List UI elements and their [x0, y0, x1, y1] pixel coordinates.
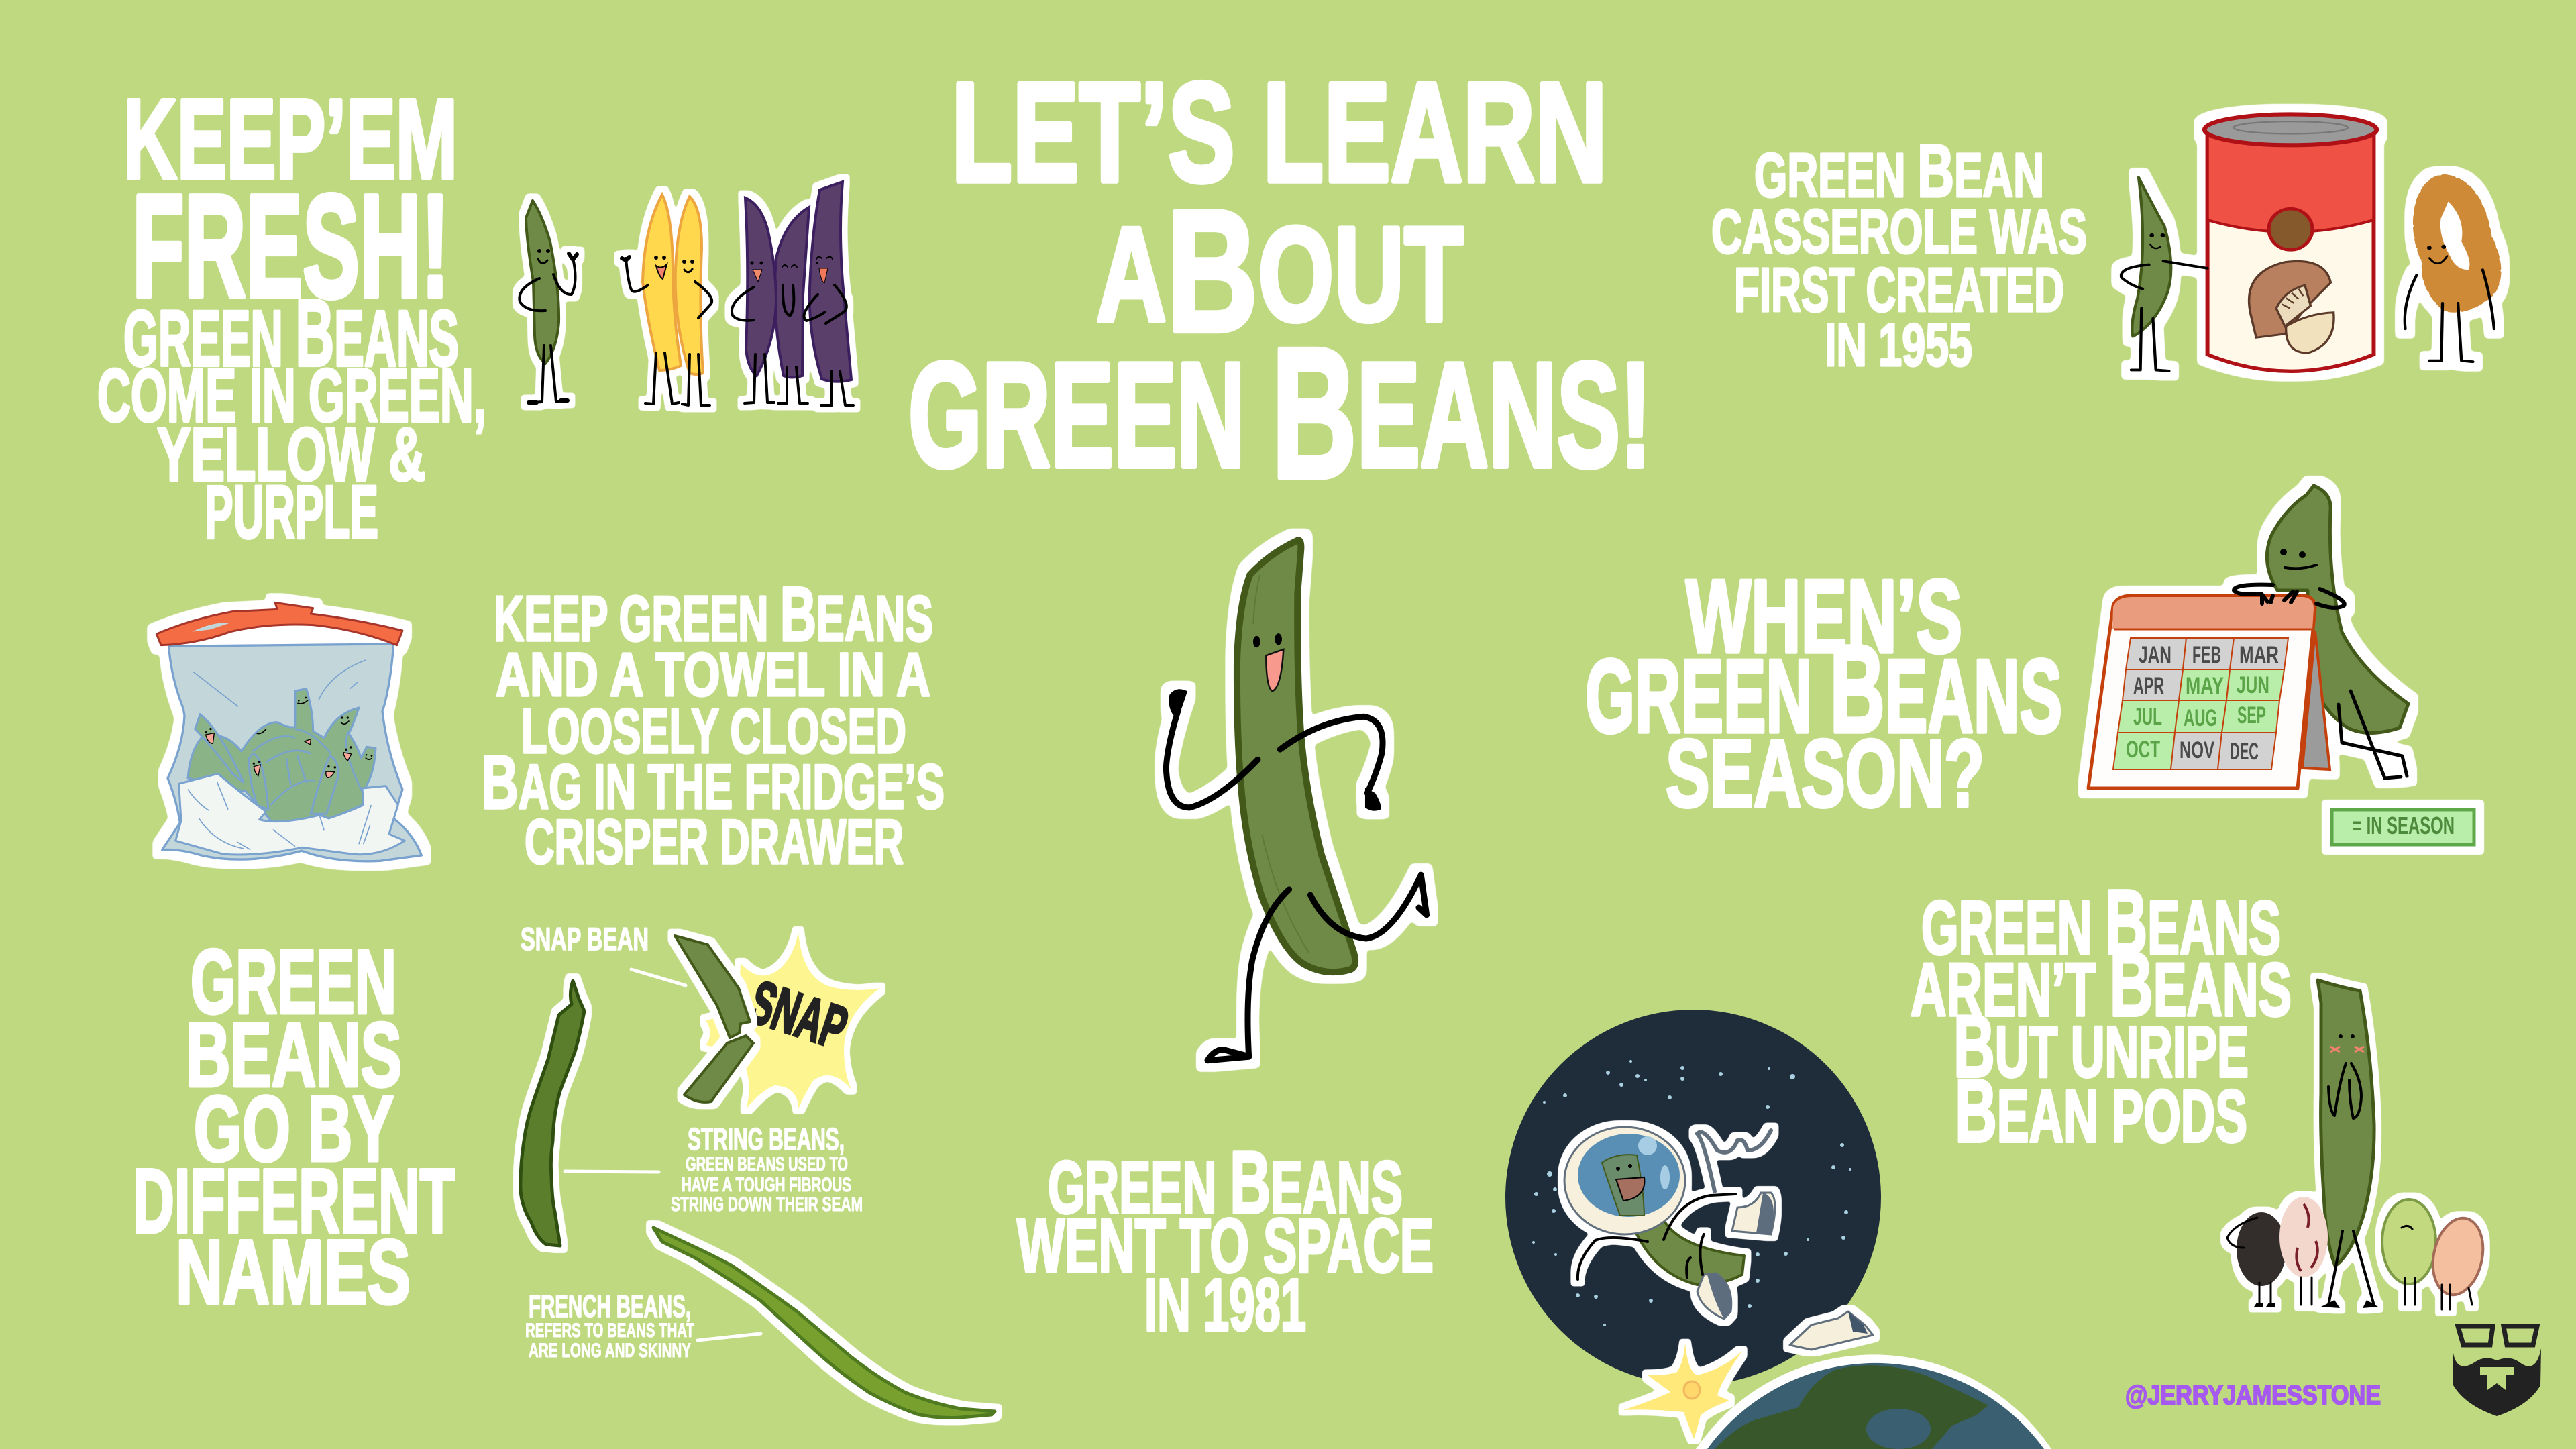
pinto bean [2279, 1197, 2328, 1305]
heading: casserole fact: CASSEROLE WAS [1711, 197, 2087, 266]
text: aren't beans: BEAN PODS [1955, 1061, 2247, 1161]
illustration: bag of beans [156, 602, 421, 861]
month labels: FEB [2192, 642, 2221, 668]
calendar front [2088, 596, 2315, 788]
heading: keep 'em fresh: FRESH! [132, 165, 449, 328]
illustration: running green bean [1166, 540, 1427, 1061]
heading: green beans go by different names: DIFFERENT [133, 1150, 455, 1252]
bean behind calendar [2267, 486, 2408, 778]
text: bag storage tip: LOOSELY CLOSED [521, 696, 906, 766]
heading: green beans go by different names: GREEN [191, 930, 396, 1032]
heading: green beans go by different names: GO BY [194, 1077, 394, 1181]
callout leader lines [565, 969, 761, 1340]
pale green bean [2382, 1199, 2436, 1305]
heading: green beans go by different names: BEANS [186, 1004, 402, 1106]
snap word: SNAP [742, 969, 855, 1063]
heading: green beans go by different names: NAMES [176, 1221, 411, 1323]
month labels: JUN [2237, 672, 2269, 698]
illustration: tall bean with small beans [2227, 980, 2489, 1309]
illustration: green, yellow and purple bean characters [519, 182, 853, 405]
title: LET’S LEARN [951, 53, 1607, 211]
illustration: space scene [1505, 1010, 2051, 1449]
purple bean characters [732, 182, 853, 405]
heading: when's green beans season [1585, 558, 2062, 827]
heading: casserole fact: GREEN BEAN [1754, 129, 2044, 213]
heading: when's green beans season: SEASON? [1666, 720, 1984, 827]
handle: @JERRYJAMESSTONE [2125, 1381, 2381, 1410]
towel [176, 773, 405, 855]
heading: keep 'em fresh: KEEP’EM [123, 76, 458, 203]
illustration: snap burst and snapped bean [675, 931, 880, 1109]
bean hands on calendar [2234, 585, 2345, 608]
heading: casserole fact [1711, 129, 2087, 379]
legend: in season [2332, 810, 2474, 845]
stars [1532, 1060, 1851, 1326]
month labels: MAR [2239, 642, 2279, 668]
month labels: JAN [2139, 642, 2171, 668]
illustration: soup can with bean and onion ring [2121, 114, 2498, 371]
month labels: DEC [2230, 739, 2259, 765]
arms, legs and hands [1166, 709, 1427, 1061]
title [908, 53, 1652, 517]
month labels: AUG [2184, 705, 2217, 731]
logo: bearded face with glasses [2453, 1326, 2541, 1416]
yellow bean characters [622, 195, 712, 405]
green bean character [519, 201, 577, 402]
heading: casserole fact: FIRST CREATED [1734, 255, 2064, 325]
text: green beans went to space: GREEN BEANS [1048, 1133, 1403, 1232]
callouts: bean name labels [521, 921, 863, 1362]
callouts: bean name labels: STRING BEANS, [688, 1122, 845, 1157]
heading: keep 'em fresh: PURPLE [205, 470, 378, 554]
plastic bag [162, 644, 421, 861]
night sky circle [1505, 1010, 1881, 1385]
title: A [1096, 200, 1193, 350]
heading: keep 'em fresh [97, 76, 486, 554]
heading: when's green beans season: WHEN’S [1686, 558, 1962, 674]
text: aren't beans [1911, 871, 2292, 1161]
heading: keep 'em fresh: GREEN BEANS [123, 280, 459, 386]
month cells [2113, 638, 2288, 769]
bean body [1237, 540, 1355, 972]
snap burst [706, 931, 880, 1109]
earth [1696, 1354, 2051, 1449]
text: bag storage tip: AND A TOWEL IN A [496, 641, 930, 709]
text: aren't beans: AREN’T BEANS [1911, 932, 2292, 1035]
callouts: bean name labels: ARE LONG AND SKINNY [529, 1340, 691, 1362]
callouts: bean name labels: STRING DOWN THEIR SEAM [671, 1193, 863, 1216]
snapped bean halves [675, 936, 753, 1102]
illustration: bean with season calendar [2088, 486, 2408, 788]
text: bag storage tip: BAG IN THE FRIDGE’S [482, 740, 945, 824]
legend: in season: = IN SEASON [2353, 812, 2455, 839]
green bean pointing [2121, 177, 2208, 371]
callouts: bean name labels: SNAP BEAN [521, 921, 649, 957]
month labels: MAY [2186, 673, 2224, 699]
heading: when's green beans season: GREEN BEANS [1585, 620, 2062, 759]
heading: keep 'em fresh: COME IN GREEN, [97, 354, 486, 437]
black bean [2227, 1212, 2286, 1307]
beans inside the bag [188, 689, 376, 823]
text: aren't beans: BUT UNRIPE [1953, 997, 2249, 1095]
tall bean [2318, 980, 2378, 1308]
text: green beans went to space [1017, 1133, 1434, 1346]
calendar back [2302, 631, 2330, 769]
astronaut bean [1564, 1127, 1775, 1319]
illustration: string bean [521, 981, 584, 1246]
face [1253, 636, 1260, 647]
callouts: bean name labels: GREEN BEANS USED TO [686, 1153, 848, 1175]
soup can [2204, 114, 2377, 371]
callouts: bean name labels: HAVE A TOUGH FIBROUS [682, 1174, 851, 1196]
month labels: NOV [2180, 737, 2214, 763]
title: EANS! [1357, 332, 1652, 498]
lost boot [1790, 1311, 1873, 1350]
text: aren't beans: GREEN BEANS [1921, 871, 2281, 974]
month labels: SEP [2237, 702, 2266, 729]
text: green beans went to space: WENT TO SPACE [1017, 1203, 1434, 1289]
illustration: french bean [653, 1228, 995, 1417]
text: bag storage tip: CRISPER DRAWER [525, 806, 904, 877]
text: bag storage tip [482, 572, 945, 877]
text: green beans went to space: IN 1981 [1144, 1264, 1306, 1346]
callouts: bean name labels: FRENCH BEANS, [529, 1289, 691, 1324]
title: OUT [1258, 200, 1464, 350]
onion ring character [2405, 177, 2498, 362]
month labels [2126, 642, 2279, 765]
month labels: APR [2133, 673, 2164, 699]
peach bean [2426, 1214, 2489, 1309]
heading: keep 'em fresh: YELLOW & [157, 413, 425, 496]
heading: casserole fact: IN 1955 [1825, 312, 1972, 379]
heading: green beans go by different names [133, 930, 455, 1323]
title: B [1271, 309, 1357, 517]
title: GREEN [908, 332, 1438, 498]
month labels: JUL [2133, 704, 2162, 730]
sun burst [1623, 1343, 1742, 1439]
month labels: OCT [2126, 737, 2160, 763]
callouts: bean name labels: REFERS TO BEANS THAT [525, 1320, 694, 1342]
title: B [1167, 174, 1258, 369]
text: bag storage tip: KEEP GREEN BEANS [494, 572, 933, 657]
orange zipper [156, 602, 402, 645]
